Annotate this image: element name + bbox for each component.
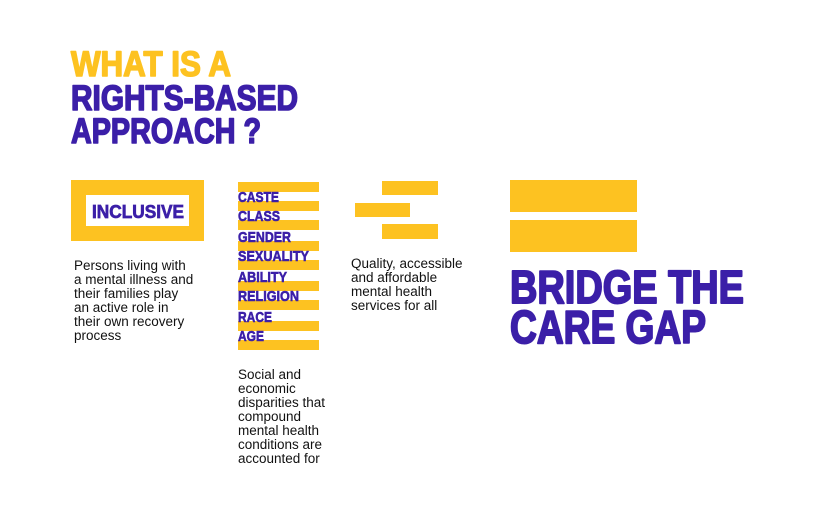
- heading: bridge the care gap: BRIDGE THE: [510, 261, 744, 313]
- panel: bridge the care gap: [510, 180, 744, 353]
- icon: stripes with categories: CLASS: [238, 208, 280, 225]
- text: disparities description: economic: [238, 381, 296, 396]
- heading: bridge the care gap: CARE GAP: [510, 301, 706, 353]
- text: disparities description: accounted for: [238, 451, 320, 466]
- text: inclusive description: process: [74, 328, 122, 343]
- text: inclusive description: Persons living with: [74, 258, 186, 273]
- text: quality description: services for all: [351, 298, 437, 313]
- heading: bridge the care gap: [510, 261, 744, 353]
- icon: stripes with categories: AGE: [238, 328, 264, 345]
- title: RIGHTS-BASED: [71, 79, 298, 118]
- icon: stripes with categories: [238, 182, 319, 350]
- text: inclusive description: their families play: [74, 286, 179, 301]
- text: disparities description: conditions are: [238, 437, 322, 452]
- icon: offset bars: [355, 181, 438, 239]
- icon: stripes with categories: RACE: [238, 309, 272, 326]
- text: quality description: and affordable: [351, 270, 437, 285]
- icon: inclusive box: [71, 180, 204, 241]
- panel: inclusive: [71, 180, 204, 343]
- panel: quality services: [351, 181, 466, 313]
- icon: inclusive box: INCLUSIVE: [92, 202, 184, 222]
- icon: stripes with categories: CASTE: [238, 189, 279, 206]
- icon: stripes with categories: ABILITY: [238, 269, 287, 286]
- title: APPROACH ?: [71, 112, 261, 151]
- text: quality description: mental health: [351, 284, 432, 299]
- text: inclusive description: a mental illness and: [74, 272, 193, 287]
- title: WHAT IS A: [71, 45, 231, 84]
- text: quality description: Quality, accessible: [351, 256, 463, 271]
- text: inclusive description: their own recovery: [74, 314, 185, 329]
- icon: stripes with categories: GENDER: [238, 229, 291, 246]
- icon: stripes with categories: RELIGION: [238, 288, 299, 305]
- text: disparities description: disparities that: [238, 395, 325, 410]
- text: disparities description: compound: [238, 409, 301, 424]
- panel: disparities: [238, 182, 329, 466]
- text: disparities description: mental health: [238, 423, 319, 438]
- text: inclusive description: an active role in: [74, 300, 169, 315]
- title: [71, 45, 298, 151]
- icon: stripes with categories: SEXUALITY: [238, 248, 309, 265]
- text: disparities description: Social and: [238, 367, 301, 382]
- icon: two bars: [510, 180, 637, 252]
